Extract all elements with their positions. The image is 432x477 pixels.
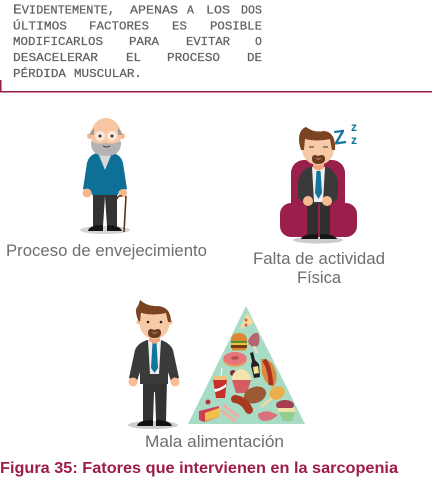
intro text block: POSIBLE (210, 20, 262, 34)
icon: chicken leg (261, 384, 287, 407)
icon: cupcake (230, 369, 251, 393)
intro text block: DOS (241, 4, 262, 18)
icon: soda cup (213, 368, 227, 398)
intro text block: MUSCULAR. (74, 68, 142, 81)
label: lack of activity: Física (297, 269, 342, 287)
intro text block: APENAS (130, 4, 178, 18)
icon: old man with cane (80, 118, 130, 234)
intro text block: PARA (129, 36, 159, 49)
icon: hot dog (261, 359, 277, 387)
label: lack of activity: Falta de actividad (253, 250, 385, 268)
intro text block: DESACELERAR (13, 52, 98, 65)
icon: sleep letters (332, 120, 357, 150)
pyramid background (188, 306, 305, 424)
intro text block: FACTORES (89, 20, 149, 34)
intro text block: MODIFICARLOS (13, 36, 103, 49)
icon: burger (231, 333, 247, 350)
food pyramid (188, 306, 305, 424)
icon: sleep letters: z (351, 133, 357, 147)
intro text block: ÚLTIMOS (13, 20, 67, 34)
figure caption: Figura 35: Fatores que intervienen en la sarcopenia (0, 460, 398, 477)
icon: donut (223, 352, 247, 367)
icon: small cupcake (276, 400, 295, 421)
intro text block: ES (172, 20, 187, 34)
intro text block (13, 2, 262, 81)
label: poor diet: Mala alimentación (145, 433, 284, 451)
intro text block: PROCESO (167, 52, 220, 65)
icon: sleep letters: Z (332, 126, 347, 150)
icon: sleep letters: z (351, 120, 357, 134)
intro text block: PÉRDIDA (13, 67, 66, 81)
icon: cake (199, 400, 219, 422)
intro text block: EVITAR (186, 36, 230, 49)
label: aging: Proceso de envejecimiento (6, 242, 207, 260)
icon: pizza (240, 313, 254, 329)
intro text block: O (255, 36, 262, 49)
icon: raw meat (258, 411, 278, 421)
icon: ham (248, 333, 260, 353)
icon: sausage (235, 399, 249, 410)
intro text block: LOS (206, 4, 230, 18)
icon: sleeping man in armchair (280, 127, 357, 244)
icon: bacon (221, 405, 239, 422)
intro text block: A (187, 4, 194, 18)
intro text block: EVIDENTEMENTE, (13, 2, 115, 18)
icon: bottle (250, 352, 260, 378)
icon: standing man (128, 300, 180, 429)
intro text block: EL (126, 52, 141, 65)
section rule (0, 80, 432, 92)
icon: steak (241, 384, 269, 406)
intro text block: DE (247, 52, 262, 65)
label: lack of activity (253, 250, 385, 287)
